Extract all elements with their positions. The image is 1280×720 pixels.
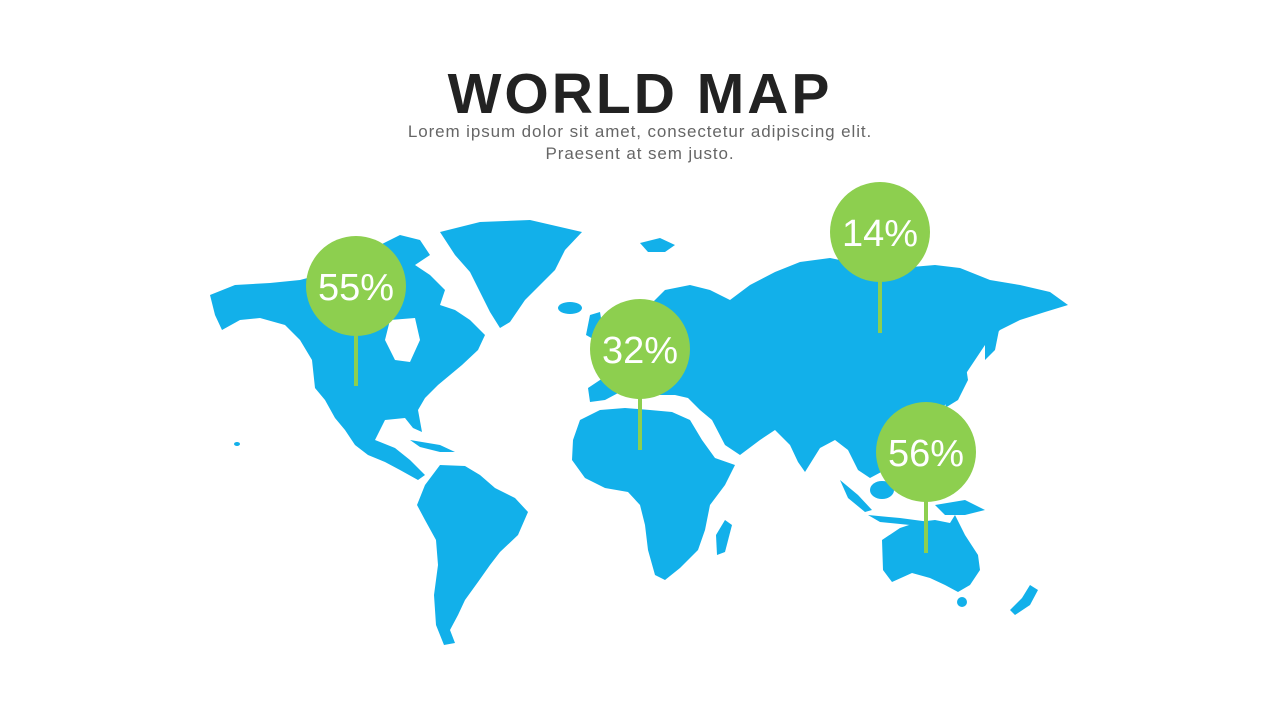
pin: 14%: 14% xyxy=(842,213,918,255)
svalbard xyxy=(640,238,675,252)
title: WORLD MAP xyxy=(448,62,832,126)
north america xyxy=(210,235,485,480)
madagascar xyxy=(716,520,732,555)
pin: 56%: 56% xyxy=(888,433,964,475)
se asia islands xyxy=(840,480,872,512)
subtitle xyxy=(408,122,872,163)
britain xyxy=(586,312,603,340)
africa xyxy=(572,408,735,580)
pin: 32% xyxy=(590,299,690,450)
australia xyxy=(882,515,980,592)
pin: 56% xyxy=(876,402,976,553)
kamchatka/japan xyxy=(985,325,1000,360)
greenland xyxy=(440,220,582,328)
caribbean xyxy=(410,440,455,452)
pin: 55%: 55% xyxy=(318,267,394,309)
south america xyxy=(417,465,528,645)
pin: 55% xyxy=(306,236,406,386)
hudson bay hole xyxy=(385,318,420,362)
pin: 14% xyxy=(830,182,930,333)
subtitle: Lorem ipsum dolor sit amet, consectetur adipiscing elit. xyxy=(408,122,872,141)
iceland xyxy=(558,302,582,314)
new zealand xyxy=(1010,585,1038,615)
pin: 32%: 32% xyxy=(602,330,678,372)
subtitle: Praesent at sem justo. xyxy=(546,144,734,163)
eurasia xyxy=(588,258,1068,478)
